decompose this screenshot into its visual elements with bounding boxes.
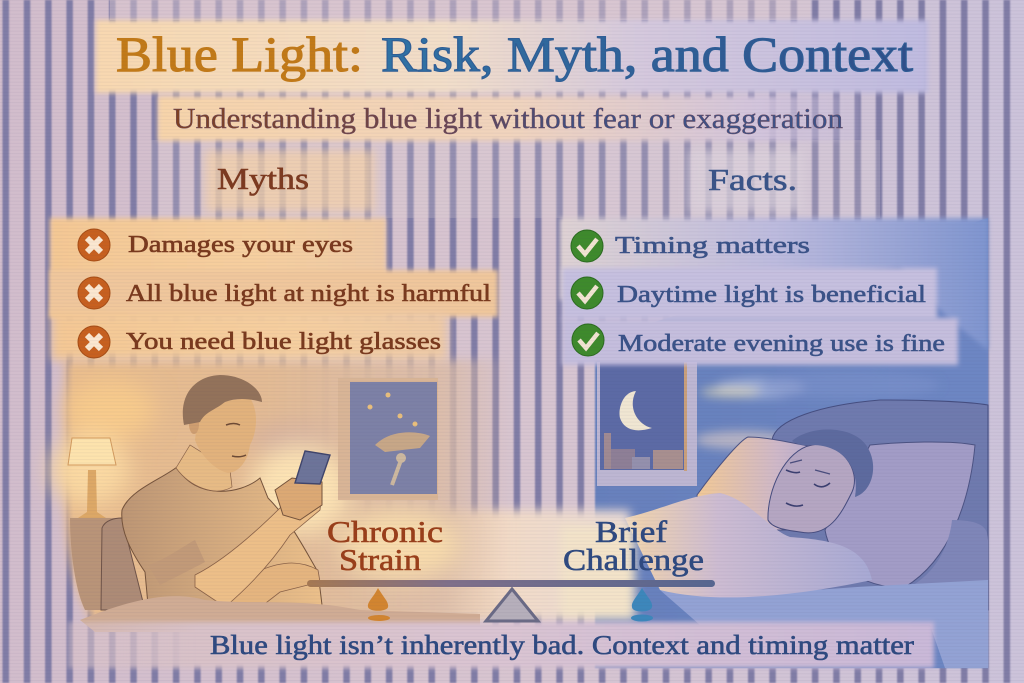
myth row 2: All blue light at night is harmful <box>126 281 491 307</box>
label: brief challenge: Challenge <box>563 542 704 577</box>
blue drop <box>631 588 653 622</box>
warm clouds <box>50 380 460 580</box>
framed picture window <box>338 378 438 500</box>
myth row 1 <box>78 229 353 261</box>
myth row 3 <box>78 326 441 358</box>
lamp <box>68 438 116 518</box>
right pillow <box>825 442 975 587</box>
fact row 3: Moderate evening use is fine <box>618 331 945 357</box>
icon: cross <box>78 277 110 309</box>
myth row 1: Damages your eyes <box>128 232 353 258</box>
lower bedding <box>660 580 988 668</box>
panel: facts list <box>560 218 988 365</box>
man using phone <box>122 375 330 607</box>
heading: myths: Myths <box>217 161 309 196</box>
fact row 2 <box>571 277 926 309</box>
bed sheet <box>80 596 480 632</box>
heading: facts: Facts. <box>708 162 797 197</box>
icon: check <box>571 230 603 262</box>
icon: check <box>571 277 603 309</box>
panel: phone scene <box>50 360 510 632</box>
nightstand and headboard <box>70 518 145 610</box>
beam <box>307 580 715 587</box>
headboard <box>772 400 988 610</box>
label: brief challenge: Brief <box>595 514 668 549</box>
label: chronic strain: Strain <box>339 542 422 577</box>
fact row 3 <box>572 324 945 357</box>
icon: check <box>572 324 604 356</box>
fact row 2: Daytime light is beneficial <box>617 282 926 308</box>
icon: cross <box>78 229 110 261</box>
orange drop <box>368 588 390 621</box>
blanket <box>625 493 872 597</box>
label: brief challenge <box>563 514 704 577</box>
sleeping person <box>768 429 873 533</box>
myth row 2 <box>78 277 491 309</box>
sky clouds <box>694 371 940 449</box>
phone <box>295 451 330 484</box>
subtitle: Understanding blue light without fear or exaggeration <box>173 104 843 135</box>
panel: myths heading <box>205 150 375 212</box>
icon: cross <box>78 326 110 358</box>
warm glow at scale <box>310 510 635 620</box>
panel: facts heading <box>688 150 803 212</box>
panel: sleep scene <box>595 218 988 668</box>
balance scale <box>307 580 715 622</box>
panel: subtitle <box>158 96 860 141</box>
title continued: Risk, Myth, and Context <box>381 26 913 82</box>
fact row 1 <box>571 230 810 262</box>
title: Blue Light: <box>116 26 363 82</box>
panel: bottom message <box>68 622 934 668</box>
myth row 3: You need blue light glasses <box>126 329 441 355</box>
fact row 1: Timing matters <box>615 233 810 259</box>
fulcrum <box>486 589 538 621</box>
panel: title <box>96 20 928 93</box>
bottom message: Blue light isn’t inherently bad. Context and timing matter <box>210 630 914 660</box>
label: chronic strain <box>327 514 443 577</box>
window with moon <box>597 362 697 486</box>
panel: myths list <box>50 218 498 360</box>
left pillow <box>697 437 830 530</box>
label: chronic strain: Chronic <box>327 514 443 549</box>
